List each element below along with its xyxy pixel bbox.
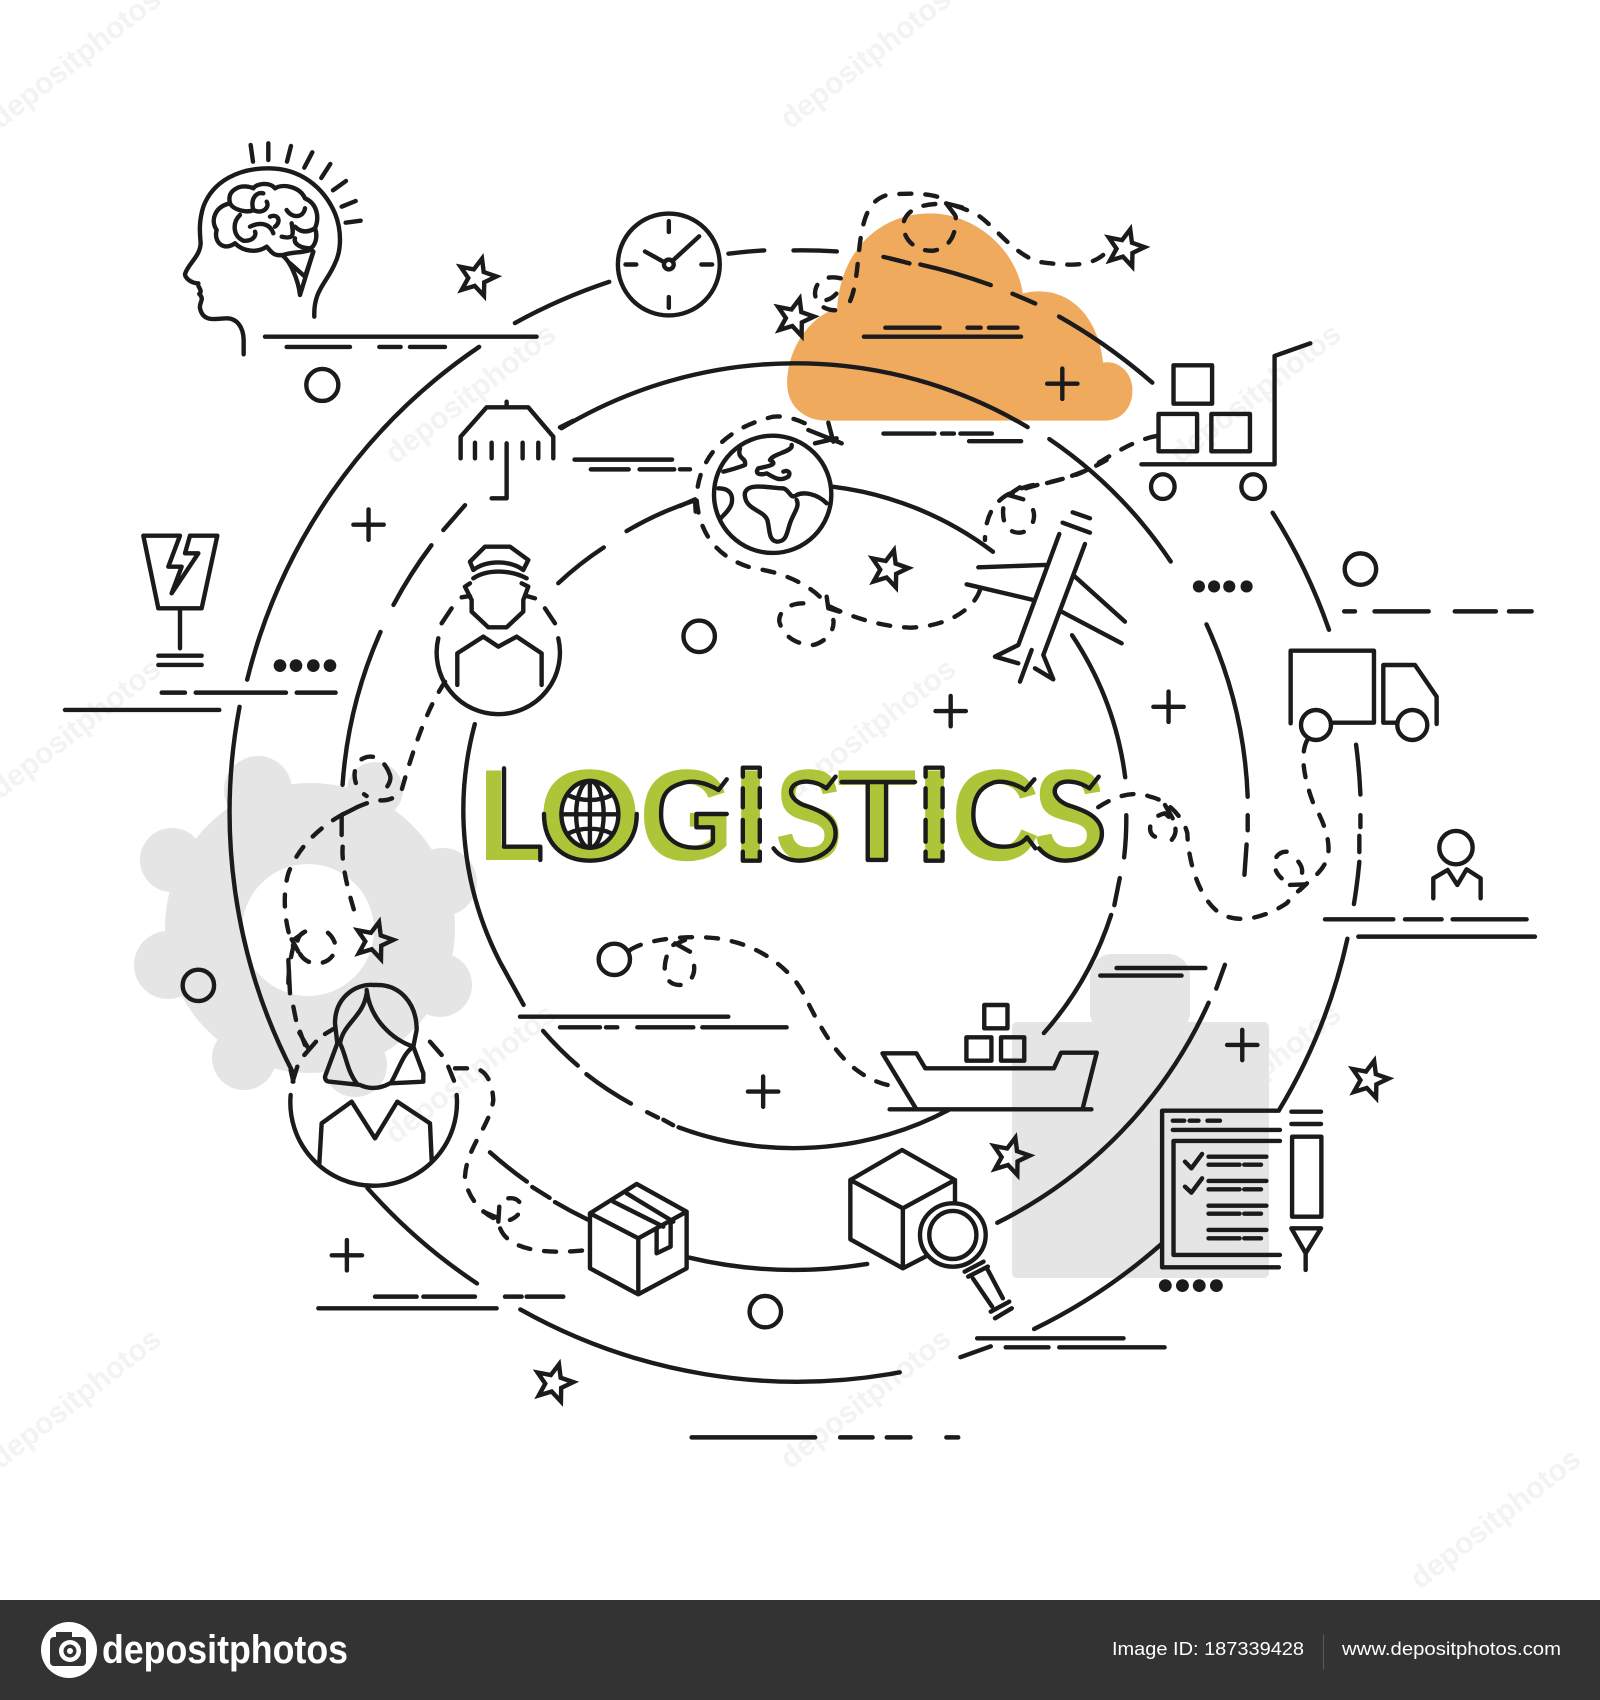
dashed orbit: [697, 416, 980, 628]
cloud dashed flight: [946, 203, 1103, 265]
lines below: [977, 1338, 1165, 1347]
title: I: [916, 742, 953, 888]
title: [479, 742, 1107, 888]
title: I: [732, 742, 769, 888]
stars: [352, 225, 1392, 1403]
concentric ring arcs: [230, 250, 1360, 1382]
pencil: [1291, 1112, 1321, 1270]
plus signs: [332, 369, 1257, 1270]
cloud overlay with dashed flight and cart: [815, 194, 1310, 499]
icon: cart with boxes: [1141, 343, 1310, 499]
dashed loop by plane: [1003, 505, 1034, 533]
background gear: [134, 756, 477, 1097]
small decorations: stars, plus signs, circles, dots, lines: [183, 225, 1532, 1437]
title globe: [561, 781, 618, 848]
outer ring: [230, 250, 1360, 1382]
lines under cloud: [883, 434, 1021, 441]
icon: clock: [618, 214, 720, 315]
title: S: [775, 742, 843, 888]
globe: [714, 436, 831, 553]
dashed path around gear: [285, 682, 445, 983]
footer bar: [0, 1600, 1600, 1700]
title: S: [1033, 742, 1107, 888]
text: depositphotos: [779, 652, 962, 806]
title: G: [639, 742, 734, 888]
icon: truck, person, dashed route: [1097, 651, 1535, 937]
title: L: [479, 742, 543, 888]
woman: [325, 985, 423, 1088]
cloud lines: [864, 328, 1021, 337]
text: depositphotos: [774, 1322, 957, 1476]
title: O: [538, 742, 641, 888]
umbrella: [461, 402, 553, 498]
background clipboard: [1012, 954, 1269, 1278]
route to ship: [520, 937, 892, 1086]
text: depositphotos: [379, 997, 562, 1151]
text: depositphotos: [1164, 997, 1347, 1151]
title: C: [951, 742, 1040, 888]
dashed path to plane: [1009, 436, 1157, 495]
ship: [882, 1053, 1097, 1109]
text: depositphotos: [1164, 317, 1347, 471]
icon: brain head: [185, 143, 537, 401]
lower left lines: [318, 1297, 563, 1308]
horizontal dash lines: [692, 611, 1532, 1437]
man avatar: [462, 547, 535, 627]
footer logo: [41, 1622, 348, 1678]
checklist: [1162, 1111, 1280, 1267]
title outline accents: [504, 768, 1102, 861]
middle ring: [343, 363, 1248, 1270]
dashed route to box: [455, 1068, 588, 1252]
cardboard box: [590, 1184, 687, 1294]
website: www.depositphotos.com: [1341, 1638, 1561, 1659]
icon: globe and plane: [680, 416, 1125, 682]
text: depositphotos: [379, 317, 562, 471]
small circles: [183, 553, 1376, 1327]
title: T: [837, 742, 916, 888]
inner ring: [463, 487, 1126, 1148]
plane: [967, 512, 1125, 682]
text: depositphotos: [1404, 1442, 1587, 1596]
fragile glass: [143, 536, 217, 608]
umbrella side lines: [575, 460, 674, 469]
icon: ship, box search, checklist: [850, 1005, 1321, 1347]
icon: fragile glass, umbrella, man: [65, 402, 573, 714]
footer logo: depositphotos: [102, 1628, 348, 1672]
icon: woman avatar and box: [288, 960, 687, 1308]
box with magnifier: [850, 1150, 955, 1268]
dot rows: [1193, 580, 1253, 593]
image id: Image ID: 187339428: [1112, 1638, 1304, 1659]
orange cloud: [787, 213, 1132, 421]
